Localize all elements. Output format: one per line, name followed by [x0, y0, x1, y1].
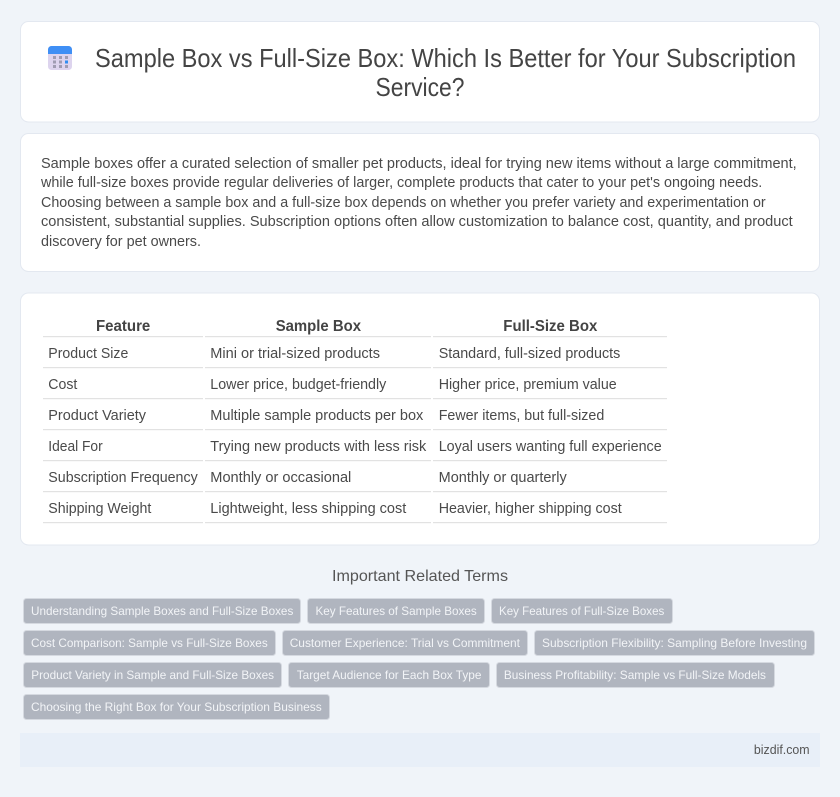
tag: [282, 630, 528, 656]
intro paragraph: [40, 156, 797, 250]
intro paragraph: discovery for pet owners.: [41, 234, 201, 250]
tag: Understanding Sample Boxes and Full-Size Boxes: [31, 604, 293, 618]
table header: [96, 318, 598, 335]
heading: important related terms: Important Related Terms: [332, 568, 508, 585]
row: subscription frequency: Monthly or quarterly: [439, 470, 568, 486]
tag: [492, 598, 672, 624]
row: ideal for: Ideal For: [48, 439, 103, 455]
tag: Customer Experience: Trial vs Commitment: [290, 636, 521, 650]
panel: title card: [20, 22, 820, 122]
row: product variety: Multiple sample products per box: [210, 408, 424, 424]
row: product variety: Fewer items, but full-sized: [439, 408, 604, 424]
tag: Key Features of Full-Size Boxes: [499, 604, 664, 618]
row: subscription frequency: [48, 470, 568, 486]
intro paragraph: Sample boxes offer a curated selection of smaller pet products, ideal for trying new items without a large commitment,: [41, 156, 797, 172]
row: cost: Cost: [48, 377, 77, 393]
row: ideal for: Trying new products with less risk: [210, 439, 427, 455]
row: product size: Standard, full-sized products: [439, 346, 620, 362]
row: product size: Product Size: [48, 346, 128, 362]
footer bar: [20, 733, 820, 767]
title: [95, 45, 796, 102]
tag: Cost Comparison: Sample vs Full-Size Boxes: [31, 636, 268, 650]
tag: [24, 694, 330, 720]
panel: intro text card: [20, 134, 820, 272]
footer text: bizdif.com: [754, 742, 810, 757]
tag: Subscription Flexibility: Sampling Before Investing: [542, 636, 807, 650]
row: subscription frequency: Subscription Frequency: [48, 470, 198, 486]
tag: Target Audience for Each Box Type: [297, 668, 482, 682]
tag: Product Variety in Sample and Full-Size Boxes: [31, 668, 274, 682]
row: product variety: [48, 408, 604, 424]
row: cost: Lower price, budget-friendly: [210, 377, 387, 393]
intro paragraph: consistent, substantial supplies. Subscription options often allow customization to balance cost, quantity, and product: [41, 214, 793, 230]
row: product size: [48, 346, 620, 362]
row: cost: Higher price, premium value: [439, 377, 617, 393]
intro paragraph: while full-size boxes provide regular deliveries of larger, complete products that cater to your pet's ongoing needs.: [40, 175, 762, 191]
table header: Full-Size Box: [503, 318, 598, 335]
row: shipping weight: Lightweight, less shipping cost: [210, 501, 406, 517]
title: Sample Box vs Full-Size Box: Which Is Better for Your Subscription: [95, 45, 796, 73]
title: Service?: [376, 74, 464, 102]
tag list: related terms: [24, 598, 814, 720]
table header: Sample Box: [276, 318, 361, 335]
row: subscription frequency: Monthly or occasional: [210, 470, 351, 486]
tag: [24, 630, 276, 656]
row: ideal for: [48, 439, 662, 455]
row: product size: Mini or trial-sized products: [210, 346, 380, 362]
tag: [534, 630, 814, 656]
row: shipping weight: Shipping Weight: [48, 501, 151, 517]
tag: Key Features of Sample Boxes: [316, 604, 477, 618]
tag: Choosing the Right Box for Your Subscription Business: [31, 700, 322, 714]
table header: Feature: [96, 318, 151, 335]
icon: calendar: [48, 46, 72, 70]
row: shipping weight: [48, 501, 622, 517]
tag: Business Profitability: Sample vs Full-Size Models: [504, 668, 766, 682]
tag: [496, 662, 774, 688]
tag: [288, 662, 490, 688]
row: cost: [48, 377, 617, 393]
panel: comparison table card: [20, 293, 820, 545]
row: ideal for: Loyal users wanting full experience: [439, 439, 662, 455]
row: product variety: Product Variety: [48, 408, 147, 424]
tag: [24, 598, 300, 624]
intro paragraph: Choosing between a sample box and a full-size box depends on whether you prefer variety and experimentation or: [41, 195, 766, 211]
tag: [308, 598, 484, 624]
row: shipping weight: Heavier, higher shipping cost: [439, 501, 622, 517]
tag: [24, 662, 282, 688]
